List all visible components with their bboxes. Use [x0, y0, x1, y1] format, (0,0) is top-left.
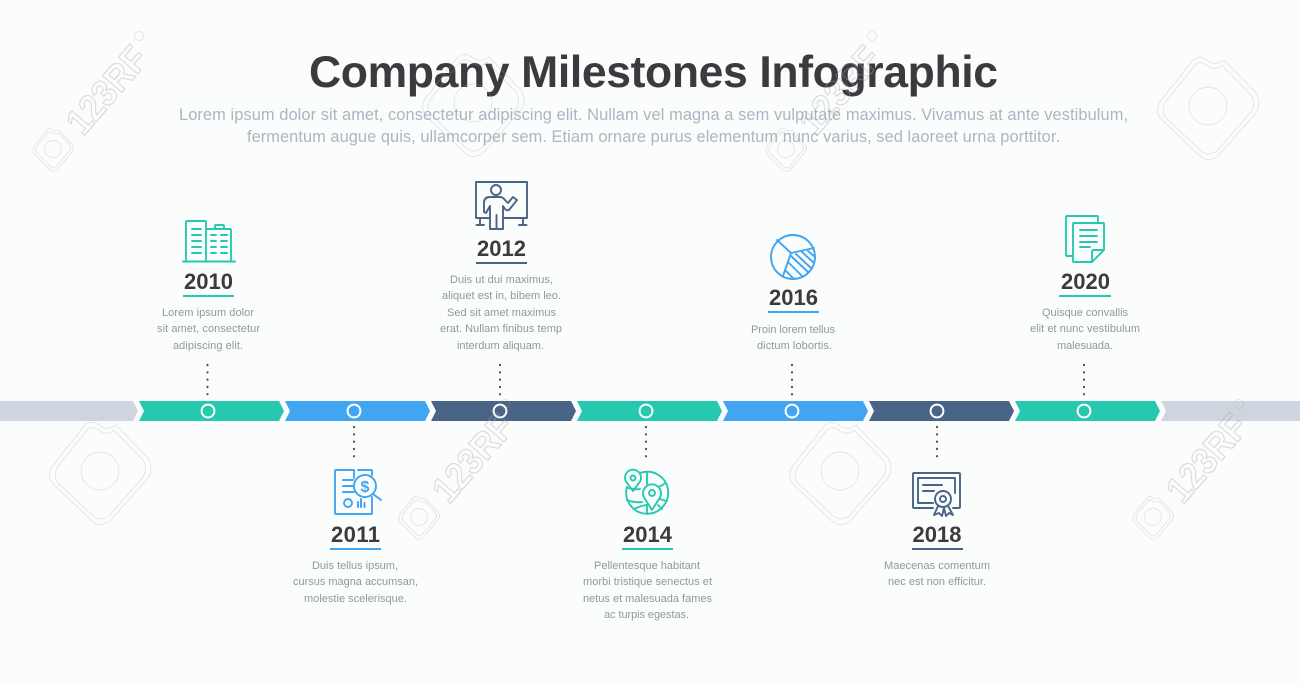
icon: hatched pie chart	[771, 235, 815, 279]
icon: stacked documents	[1066, 216, 1104, 262]
description: dictum lobortis.	[757, 340, 832, 352]
description: Sed sit amet maximus	[447, 307, 556, 319]
description: Pellentesque habitant	[594, 560, 700, 572]
dotted connector	[353, 427, 355, 457]
year underline	[183, 295, 234, 297]
year underline	[622, 548, 673, 550]
description	[1030, 307, 1140, 352]
dotted connector	[936, 427, 938, 457]
description: erat. Nullam finibus temp	[440, 323, 562, 335]
milestone 2010	[157, 221, 260, 395]
milestone 2018	[884, 427, 990, 588]
icon: globe with map pins	[625, 470, 668, 514]
description	[884, 560, 990, 588]
subtitle text: Lorem ipsum dolor sit amet, consectetur adipiscing elit. Nullam vel magna a sem vulputate maximus. Vivamus at ante vestibulum,	[179, 106, 1128, 124]
description	[293, 560, 418, 605]
title: Company Milestones Infographic	[309, 48, 998, 97]
description: interdum aliquam.	[457, 340, 544, 352]
description: Maecenas comentum	[884, 560, 990, 572]
year underline	[330, 548, 381, 550]
description: Duis ut dui maximus,	[450, 274, 553, 286]
description: Proin lorem tellus	[751, 324, 836, 336]
text: 123RF	[1158, 406, 1256, 510]
description: ac turpis egestas.	[604, 609, 689, 621]
icon: office buildings	[183, 221, 235, 262]
text: 123RF	[58, 38, 156, 142]
text: 123RF	[791, 38, 889, 142]
year underline	[912, 548, 963, 550]
description: morbi tristique senectus et	[583, 576, 712, 588]
milestone 2014	[583, 427, 712, 621]
subtitle text	[179, 106, 1128, 146]
description: malesuada.	[1057, 340, 1113, 352]
year: 2012	[477, 236, 526, 261]
icon: financial report with magnifier: $	[361, 479, 370, 496]
milestone 2012	[440, 182, 562, 395]
year: 2010	[184, 269, 233, 294]
description: aliquet est in, bibem leo.	[442, 290, 561, 302]
year: 2016	[769, 285, 818, 310]
year: 2020	[1061, 269, 1110, 294]
description: sit amet, consectetur	[157, 323, 260, 335]
description: adipiscing elit.	[173, 340, 243, 352]
dotted connector	[1083, 365, 1085, 395]
description: molestie scelerisque.	[304, 593, 407, 605]
icon: presenter at board	[476, 182, 527, 229]
year underline	[476, 262, 527, 264]
description	[157, 307, 260, 352]
description: Lorem ipsum dolor	[162, 307, 254, 319]
description: elit et nunc vestibulum	[1030, 323, 1140, 335]
icon: certificate with seal	[913, 473, 960, 516]
description: Duis tellus ipsum,	[312, 560, 398, 572]
description: nec est non efficitur.	[888, 576, 986, 588]
description	[583, 560, 712, 621]
description	[751, 324, 836, 352]
year: 2018	[912, 522, 962, 547]
dotted connector	[206, 365, 209, 395]
timeline bar	[0, 401, 1300, 421]
year: 2011	[331, 522, 380, 547]
dotted connector	[499, 365, 501, 395]
description: cursus magna accumsan,	[293, 576, 418, 588]
year: 2014	[623, 522, 673, 547]
year underline	[1059, 295, 1111, 297]
description: netus et malesuada fames	[583, 593, 712, 605]
milestone 2011	[293, 427, 418, 605]
milestone 2020	[1030, 216, 1140, 395]
icon: financial report with magnifier	[335, 470, 381, 514]
description: Quisque convallis	[1042, 307, 1128, 319]
milestone 2016	[751, 235, 836, 395]
subtitle text: fermentum augue quis, ullamcorper sem. Etiam ornare purus elementum nunc varius, sed laoreet urna porttitor.	[247, 128, 1060, 146]
dotted connector	[791, 365, 793, 395]
dotted connector	[645, 427, 647, 457]
year underline	[768, 311, 819, 313]
text: 123RF	[424, 406, 522, 510]
description	[440, 274, 562, 352]
